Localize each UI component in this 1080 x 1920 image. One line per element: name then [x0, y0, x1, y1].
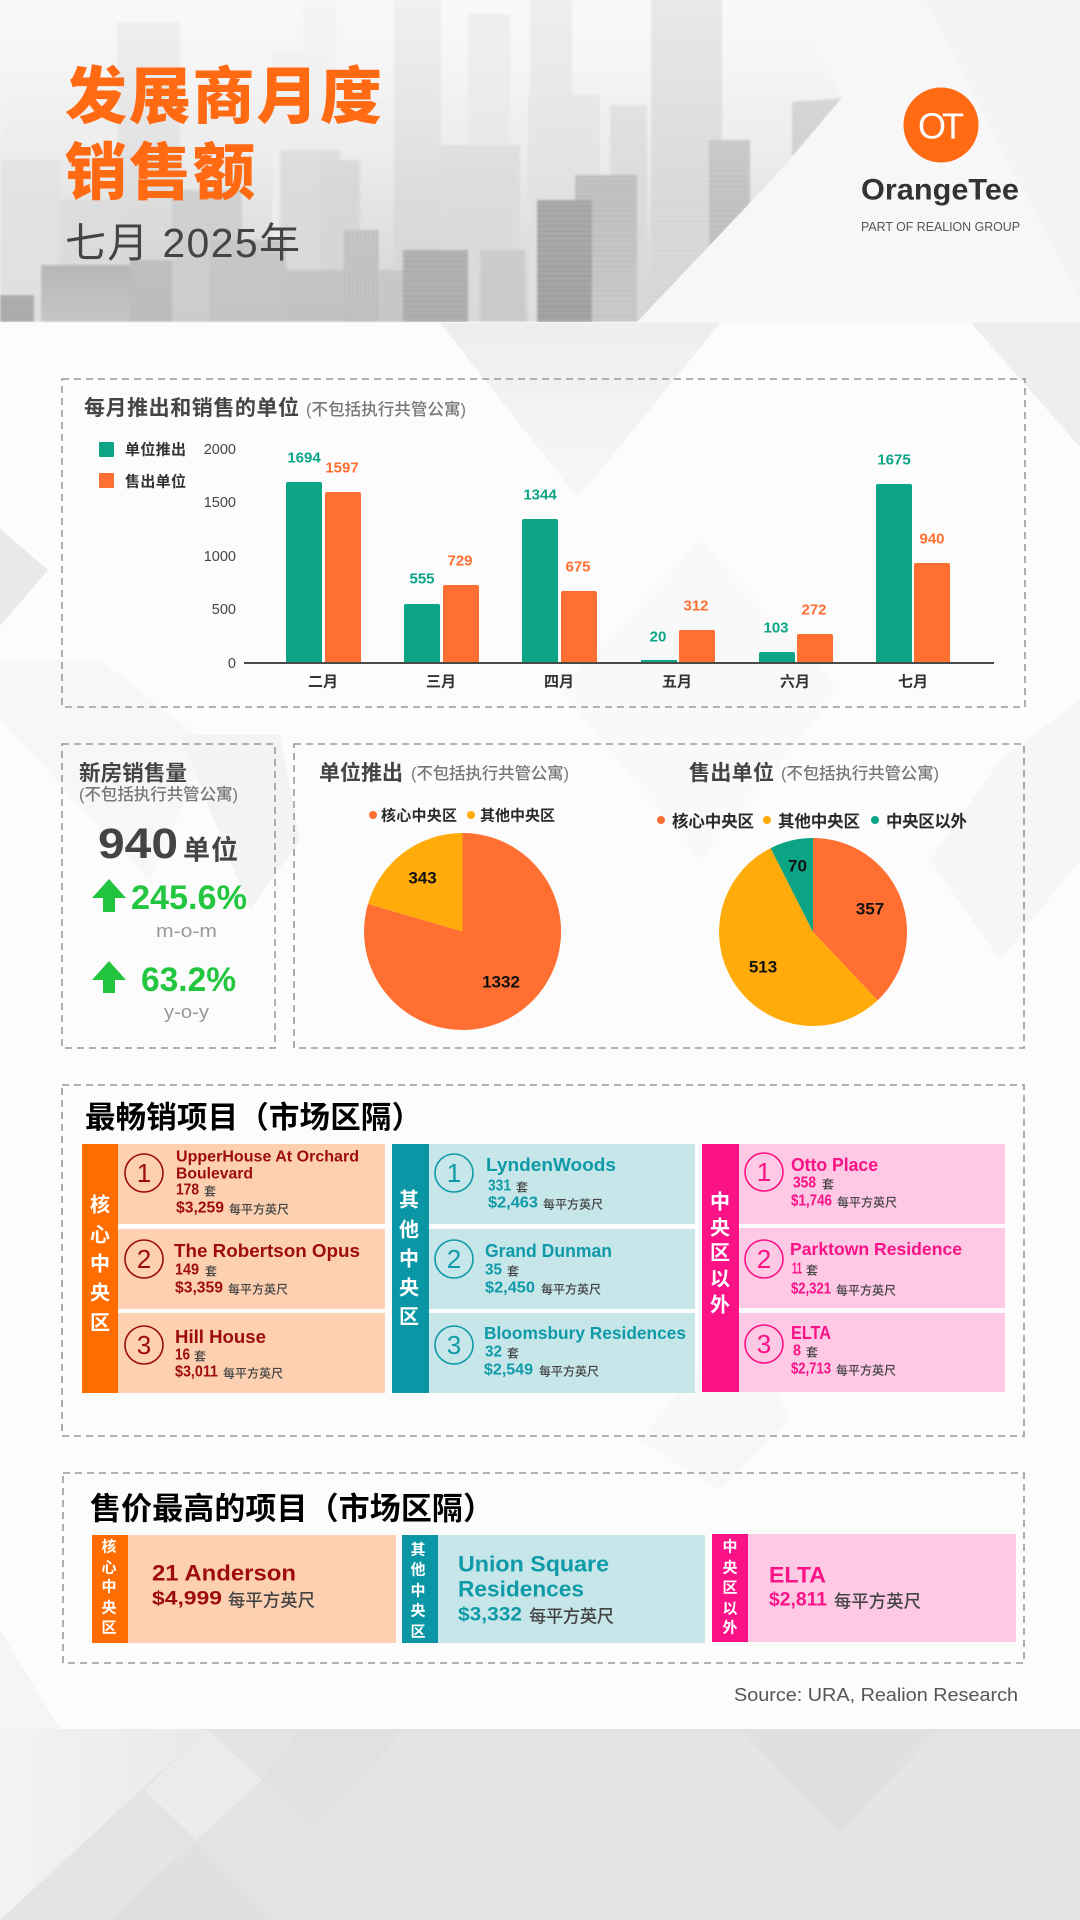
- rank 2 The Robertson Opus: 149: [175, 1262, 199, 1278]
- rank 3 ELTA: 每平方英尺: [836, 1362, 896, 1378]
- stat: 63.2% y-o-y: 63.2%: [141, 961, 236, 999]
- stats heading: 新房销售量: [79, 756, 187, 788]
- rank 2 Parktown Residence: $2,321: [791, 1280, 831, 1298]
- pie chart: units sold: 70: [788, 856, 807, 876]
- card: core central region: 每平方英尺: [228, 1588, 315, 1612]
- rank 1 UpperHouse: 1: [137, 1158, 151, 1188]
- rank 2 Parktown Residence: [745, 1239, 962, 1298]
- rank 1 LyndenWoods: LyndenWoods: [486, 1155, 616, 1175]
- stats heading: [79, 756, 238, 804]
- column: rest of central region: 央: [399, 1272, 419, 1300]
- header skyline image: [0, 0, 860, 322]
- rank 1 UpperHouse: [125, 1148, 359, 1218]
- pie chart: units sold: (不包括执行共管公寓): [781, 764, 939, 783]
- section heading: 售价最高的项目（市场区隔）: [90, 1484, 494, 1528]
- rank 3 ELTA: 3: [757, 1329, 771, 1359]
- column: outside central region: 央: [710, 1212, 730, 1240]
- bar chart: 1344: [523, 486, 557, 504]
- rank 2 Grand Dunman: 套: [507, 1262, 519, 1280]
- rank 2 The Robertson Opus: 2: [137, 1244, 151, 1274]
- rank 1 Otto Place: 每平方英尺: [837, 1194, 897, 1210]
- bar chart: 555: [409, 570, 435, 588]
- pie chart: units launched: 其他中央区: [480, 804, 555, 826]
- rank 1 Otto Place: 套: [822, 1176, 834, 1192]
- logo: OrangeTee: OT: [918, 106, 964, 146]
- pie chart: units launched: 1332: [482, 972, 520, 992]
- bar chart: 1675: [877, 452, 911, 468]
- bar chart: 312: [683, 598, 709, 614]
- bar chart: 272: [801, 602, 827, 618]
- rank 3 Hill House: 每平方英尺: [223, 1364, 283, 1382]
- rank 2 Grand Dunman: [435, 1240, 612, 1298]
- logo: OrangeTee: OrangeTee: [861, 174, 1019, 206]
- card: rest of central region: 中: [410, 1580, 426, 1600]
- card: core central region: [92, 1535, 396, 1643]
- card: rest of central region: Union Square: [458, 1552, 609, 1576]
- rank 1 Otto Place: $1,746: [791, 1192, 832, 1210]
- column: core central region: 核: [90, 1188, 110, 1218]
- card: rest of central region: 每平方英尺: [529, 1604, 614, 1628]
- stat: 940 units: 单位: [183, 828, 238, 868]
- chart legend: 单位推出: [125, 438, 186, 460]
- stat: 63.2% y-o-y: [141, 961, 236, 1022]
- bar chart: 20: [650, 628, 666, 646]
- rank 3 Bloomsbury Residences: [435, 1323, 686, 1380]
- bar chart: 103: [763, 620, 789, 636]
- pie chart: units sold: 售出单位: [689, 757, 774, 787]
- card: outside central region: 每平方英尺: [834, 1588, 921, 1614]
- card: core central region: 中: [101, 1576, 117, 1596]
- pie chart: units sold: 核心中央区: [672, 808, 754, 832]
- stat: 245.6% m-o-m: 245.6%: [131, 879, 247, 917]
- column: rest of central region: 中: [399, 1242, 419, 1272]
- rank 1 Otto Place: 358: [793, 1174, 816, 1192]
- panel: new home sales: [62, 744, 275, 1048]
- bar chart: 七月: [898, 670, 928, 692]
- column: core central region: 中: [90, 1248, 110, 1276]
- pie chart: units sold: 其他中央区: [778, 808, 860, 832]
- card: outside central region: 外: [722, 1616, 738, 1638]
- bar chart: 675: [565, 558, 591, 576]
- column: rest of central region: 他: [399, 1214, 419, 1242]
- card: core central region: 心: [101, 1556, 117, 1578]
- card: core central region: 央: [101, 1596, 117, 1618]
- icon: up arrow y-o-y: [92, 961, 126, 993]
- rank 2 The Robertson Opus: [125, 1240, 360, 1298]
- column: outside central region: 区: [710, 1236, 730, 1266]
- chart heading: (不包括执行共管公寓): [306, 400, 466, 419]
- rank 2 Grand Dunman: 每平方英尺: [541, 1280, 601, 1298]
- chart heading: 每月推出和销售的单位: [84, 392, 299, 422]
- title: 销售额: [65, 122, 255, 212]
- column: rest of central region: 区: [399, 1300, 419, 1330]
- card: rest of central region: Residences: [458, 1576, 584, 1602]
- rank 3 ELTA: ELTA: [791, 1323, 831, 1343]
- pie chart: units sold: 357: [856, 900, 884, 918]
- bar chart: 二月: [308, 670, 338, 692]
- rank 2 The Robertson Opus: $3,359: [175, 1280, 223, 1296]
- bar chart: 三月: [426, 670, 456, 692]
- rank 3 Hill House: 3: [137, 1330, 151, 1360]
- rank 1 UpperHouse: UpperHouse At Orchard: [176, 1148, 359, 1166]
- rank 3 Hill House: Hill House: [175, 1327, 266, 1347]
- rank 3 ELTA: 8: [793, 1342, 801, 1360]
- card: core central region: 21 Anderson: [152, 1560, 296, 1586]
- bar chart: 六月: [780, 670, 810, 692]
- chart heading: [84, 392, 466, 422]
- y axis labels: [204, 442, 236, 672]
- card: outside central region: 央: [722, 1556, 738, 1578]
- title: [65, 46, 382, 212]
- rank 3 Bloomsbury Residences: 32: [485, 1344, 502, 1360]
- pie chart: units sold: 中央区以外: [886, 808, 968, 832]
- rank 1 Otto Place: Otto Place: [791, 1155, 878, 1175]
- y axis labels: 0: [228, 656, 236, 672]
- panel: pie charts: [294, 744, 1024, 1048]
- subtitle date: 七月 2025年: [65, 220, 300, 266]
- bar chart: [244, 450, 994, 692]
- panel: highest priced projects: [63, 1473, 1024, 1663]
- rank 1 UpperHouse: 套: [204, 1182, 216, 1200]
- rank 2 The Robertson Opus: 每平方英尺: [228, 1280, 288, 1298]
- bar chart: 1597: [325, 460, 359, 476]
- rank 3 Hill House: [125, 1326, 283, 1382]
- rank 1 LyndenWoods: 1: [447, 1158, 461, 1188]
- column: outside central region: [702, 1144, 1005, 1392]
- bar chart: 四月: [544, 670, 574, 692]
- bar chart: 五月: [662, 670, 692, 692]
- pie chart: units sold: [657, 757, 968, 1026]
- rank 3 Bloomsbury Residences: 每平方英尺: [539, 1362, 599, 1380]
- rank 1 Otto Place: [745, 1153, 897, 1210]
- rank 1 LyndenWoods: 每平方英尺: [543, 1196, 603, 1212]
- logo: OrangeTee: [861, 88, 1020, 234]
- rank 3 Hill House: $3,011: [175, 1364, 218, 1380]
- y axis labels: 1500: [204, 495, 236, 511]
- y axis labels: 1000: [204, 549, 236, 565]
- rank 1 UpperHouse: Boulevard: [176, 1166, 253, 1182]
- title: 发展商月度: [65, 46, 382, 136]
- card: outside central region: 以: [722, 1598, 738, 1618]
- rank 1 LyndenWoods: 套: [516, 1178, 528, 1196]
- chart legend: [99, 438, 186, 492]
- rank 2 Parktown Residence: 11: [792, 1260, 802, 1278]
- rank 2 Grand Dunman: 2: [447, 1244, 461, 1274]
- card: outside central region: ELTA: [769, 1562, 826, 1588]
- pie chart: units launched: [319, 757, 569, 1030]
- card: rest of central region: 区: [410, 1620, 426, 1642]
- rank 2 Parktown Residence: Parktown Residence: [790, 1239, 962, 1259]
- stat: 245.6% m-o-m: [131, 879, 247, 941]
- column: outside central region: 中: [710, 1186, 730, 1214]
- stat: 940 units: [98, 820, 238, 868]
- rank 1 UpperHouse: 178: [176, 1182, 199, 1198]
- card: rest of central region: [402, 1535, 705, 1643]
- column: rest of central region: 其: [399, 1184, 419, 1212]
- rank 1 LyndenWoods: 331: [488, 1178, 511, 1194]
- column: core central region: 央: [90, 1276, 110, 1306]
- source note: Source: URA, Realion Research: [734, 1685, 1018, 1705]
- rank 1 LyndenWoods: $2,463: [488, 1194, 538, 1212]
- y axis labels: 2000: [204, 442, 236, 458]
- card: rest of central region: 央: [410, 1600, 426, 1620]
- rank 2 Grand Dunman: $2,450: [485, 1280, 535, 1296]
- rank 3 ELTA: [745, 1323, 896, 1378]
- card: outside central region: 中: [722, 1536, 738, 1556]
- panel: monthly launches and sales: [62, 379, 1025, 707]
- stat: 940 units: 940: [98, 820, 178, 868]
- column: outside central region: 外: [710, 1288, 730, 1318]
- rank 2 The Robertson Opus: The Robertson Opus: [174, 1241, 360, 1261]
- rank 3 Bloomsbury Residences: 3: [447, 1330, 461, 1360]
- card: outside central region: $2,811: [769, 1590, 827, 1610]
- section heading: 最畅销项目（市场区隔）: [85, 1093, 422, 1137]
- card: core central region: 核: [101, 1536, 117, 1556]
- card: core central region: $4,999: [152, 1588, 222, 1610]
- rank 3 Hill House: 16: [175, 1346, 190, 1364]
- card: rest of central region: 其: [410, 1538, 426, 1560]
- bar chart: 729: [447, 552, 473, 570]
- rank 3 Bloomsbury Residences: Bloomsbury Residences: [484, 1323, 686, 1343]
- rank 3 ELTA: $2,713: [791, 1360, 831, 1378]
- stat: 245.6% m-o-m: m-o-m: [156, 921, 217, 941]
- column: outside central region: 以: [710, 1262, 730, 1292]
- rank 3 Bloomsbury Residences: 套: [507, 1344, 519, 1362]
- pie chart: units sold: 513: [749, 958, 777, 976]
- column: core central region: 心: [90, 1218, 110, 1248]
- bar chart: 940: [919, 530, 945, 548]
- column: core central region: 区: [90, 1306, 110, 1336]
- column: core central region: [82, 1144, 385, 1393]
- stats heading: (不包括执行共管公寓): [79, 785, 238, 804]
- rank 2 The Robertson Opus: 套: [205, 1262, 217, 1280]
- panel: best selling projects: [62, 1085, 1024, 1436]
- rank 3 Hill House: 套: [194, 1348, 206, 1364]
- pie chart: units launched: 343: [408, 868, 437, 888]
- pie chart: units launched: (不包括执行共管公寓): [411, 764, 569, 783]
- rank 1 UpperHouse: $3,259: [176, 1200, 224, 1216]
- card: core central region: 区: [101, 1616, 117, 1638]
- card: outside central region: [712, 1534, 1016, 1642]
- rank 2 Parktown Residence: 每平方英尺: [836, 1282, 896, 1298]
- logo: OrangeTee: PART OF REALION GROUP: [861, 220, 1020, 234]
- rank 1 UpperHouse: 每平方英尺: [229, 1200, 289, 1218]
- chart legend: 售出单位: [125, 470, 186, 492]
- pie chart: units launched: 核心中央区: [381, 804, 457, 826]
- rank 3 Bloomsbury Residences: $2,549: [484, 1362, 533, 1378]
- rank 3 ELTA: 套: [806, 1344, 818, 1360]
- column: rest of central region: [392, 1144, 695, 1393]
- rank 1 Otto Place: 1: [757, 1157, 771, 1187]
- rank 2 Grand Dunman: Grand Dunman: [485, 1241, 612, 1261]
- stat: 63.2% y-o-y: y-o-y: [164, 1002, 209, 1022]
- icon: up arrow m-o-m: [92, 879, 126, 912]
- pie chart: units launched: 单位推出: [319, 757, 403, 787]
- rank 2 Parktown Residence: 2: [757, 1244, 771, 1274]
- card: outside central region: 区: [722, 1576, 738, 1598]
- card: rest of central region: 他: [410, 1558, 426, 1580]
- y axis labels: 500: [212, 602, 236, 618]
- bar chart: 1694: [287, 450, 321, 466]
- rank 2 Grand Dunman: 35: [485, 1262, 502, 1278]
- rank 1 LyndenWoods: [435, 1154, 616, 1212]
- rank 2 Parktown Residence: 套: [806, 1262, 818, 1278]
- card: rest of central region: $3,332: [458, 1604, 522, 1626]
